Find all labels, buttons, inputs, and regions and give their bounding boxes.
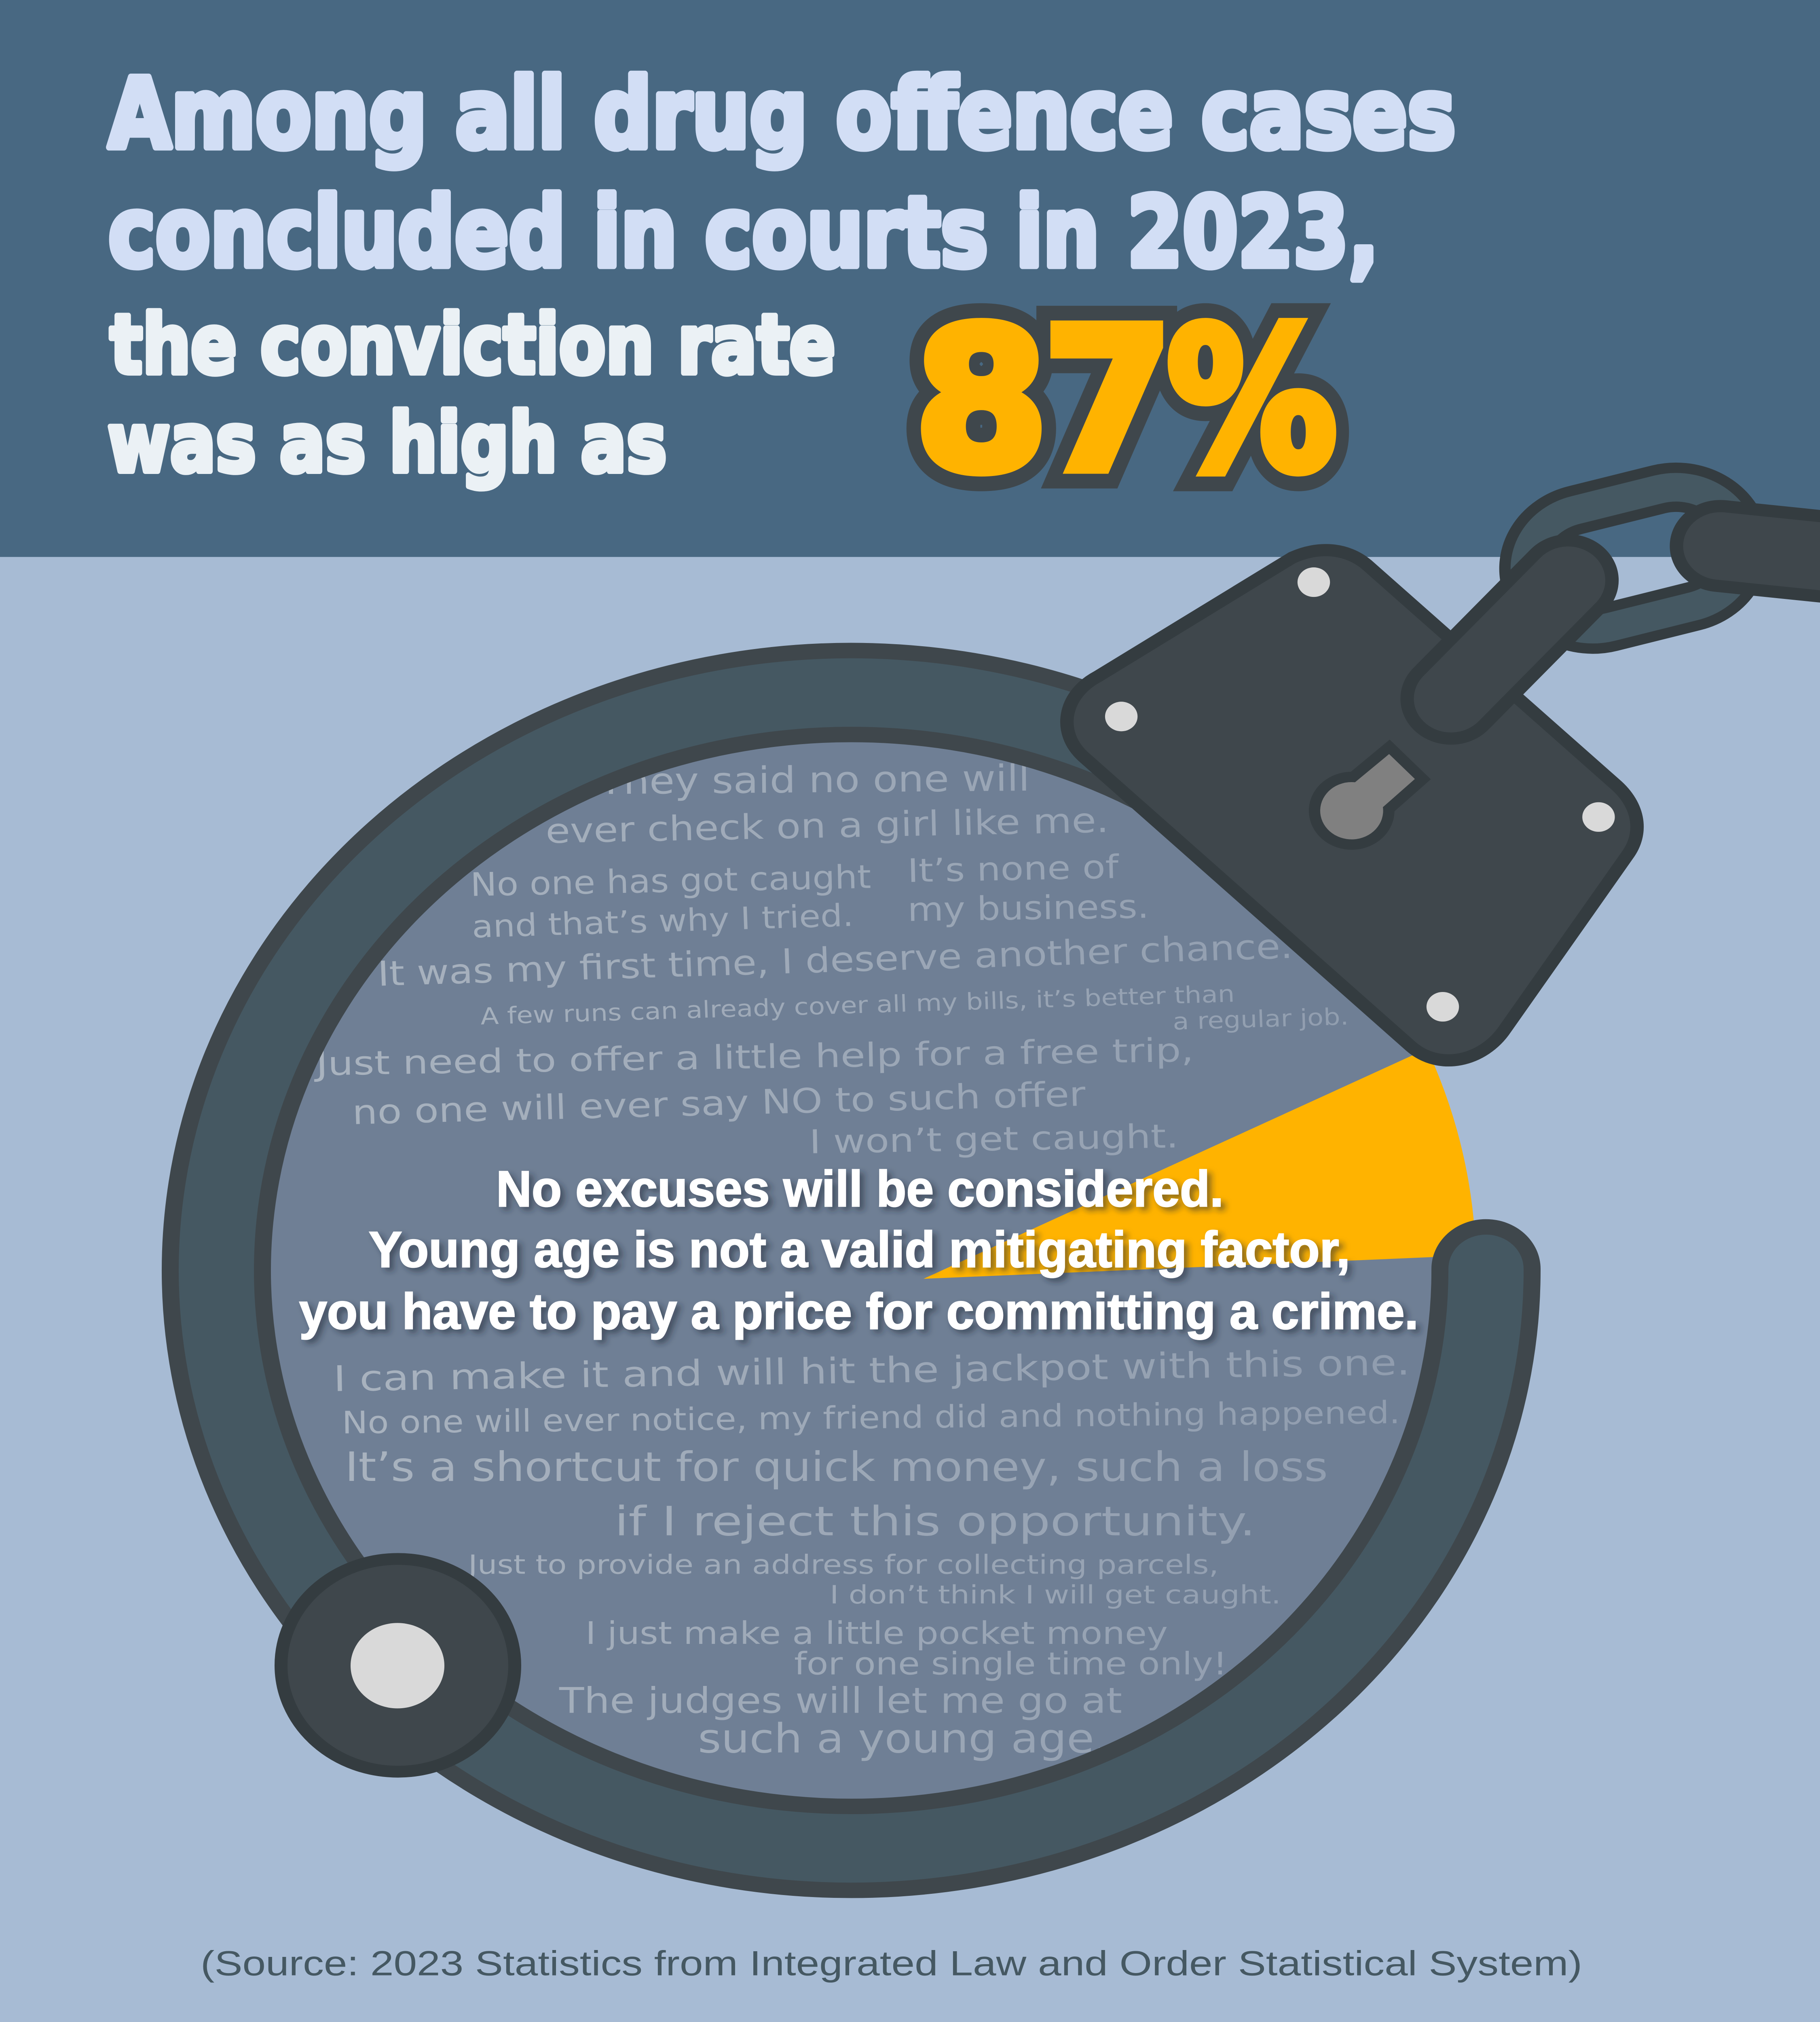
excuse 15: It’s a shortcut for quick money, such a loss (345, 1443, 1328, 1491)
excuse 22: such a young age. (698, 1715, 1108, 1762)
title line 1: Among all drug offence cases (108, 58, 1456, 170)
keyhole (1320, 754, 1415, 840)
excuse 6: my business. (907, 888, 1149, 929)
number outline: % (1167, 287, 1337, 514)
subtitle line 1: the conviction rate (110, 297, 835, 393)
excuse 12: I won’t get caught. (809, 1117, 1179, 1161)
number outline: 7 (1043, 287, 1173, 514)
excuse 8: A few runs can already cover all my bills, it’s better than (480, 981, 1235, 1030)
ring hinge screw (281, 1559, 515, 1772)
number fill: % (1167, 287, 1337, 514)
source note: (Source: 2023 Statistics from Integrated Law and Order Statistical System) (201, 1944, 1582, 1983)
padlock and chain (1067, 474, 1820, 1060)
excuse 16: if I reject this opportunity. (615, 1497, 1256, 1545)
rivet left (1105, 702, 1137, 731)
excuse 4: and that’s why I tried. (471, 897, 854, 945)
chain bar (1720, 546, 1820, 569)
excuse 5: It’s none of (907, 848, 1120, 890)
header band (0, 0, 1820, 557)
number outline (915, 287, 1337, 514)
shackle (1451, 580, 1568, 699)
title (108, 58, 1456, 491)
chain link (1511, 474, 1758, 643)
excuse 19: I just make a little pocket money (586, 1615, 1168, 1651)
message line 3: you have to pay a price for committing a crime. (299, 1283, 1418, 1340)
main message (299, 1161, 1418, 1340)
number outline: 8 (915, 287, 1048, 514)
excuse 7: It was my first time, I deserve another chance. (377, 926, 1293, 994)
message line 2: Young age is not a valid mitigating factor, (369, 1221, 1350, 1278)
rivet right (1582, 802, 1615, 832)
excuse 17: Just to provide an address for collecting parcels, (466, 1550, 1219, 1580)
handcuff ring (216, 692, 1486, 1849)
excuse 13: I can make it and will hit the jackpot with this one. (333, 1342, 1410, 1400)
excuses text (313, 757, 1410, 1762)
rivet top (1298, 567, 1330, 597)
number fill (915, 287, 1337, 514)
excuse 21: The judges will let me go at (559, 1680, 1122, 1721)
excuse 3: No one has got caught (470, 858, 871, 904)
excuse 11: no one will ever say NO to such offer (352, 1074, 1087, 1132)
excuse 14: No one will ever notice, my friend did and nothing happened. (342, 1394, 1400, 1441)
padlock body (1067, 550, 1637, 1060)
number fill: 7 (1043, 287, 1173, 514)
excuse 20: for one single time only! (794, 1646, 1227, 1682)
message line 1: No excuses will be considered. (496, 1161, 1224, 1217)
orange 13 percent wedge (924, 1049, 1476, 1279)
excuse 18: I don’t think I will get caught. (830, 1580, 1281, 1610)
excuse 1: They said no one will (598, 757, 1030, 803)
big number 87% (915, 287, 1337, 514)
rivet bottom (1427, 992, 1459, 1022)
excuse 9: a regular job. (1172, 1003, 1349, 1035)
excuse 10: Just need to offer a little help for a free trip, (313, 1031, 1194, 1083)
handcuff inner disk (226, 702, 1476, 1839)
number fill: 8 (915, 287, 1048, 514)
excuse 2: ever check on a girl like me. (545, 800, 1109, 851)
subtitle line 2: was as high as (108, 396, 667, 491)
title line 2: concluded in courts in 2023, (108, 176, 1379, 289)
